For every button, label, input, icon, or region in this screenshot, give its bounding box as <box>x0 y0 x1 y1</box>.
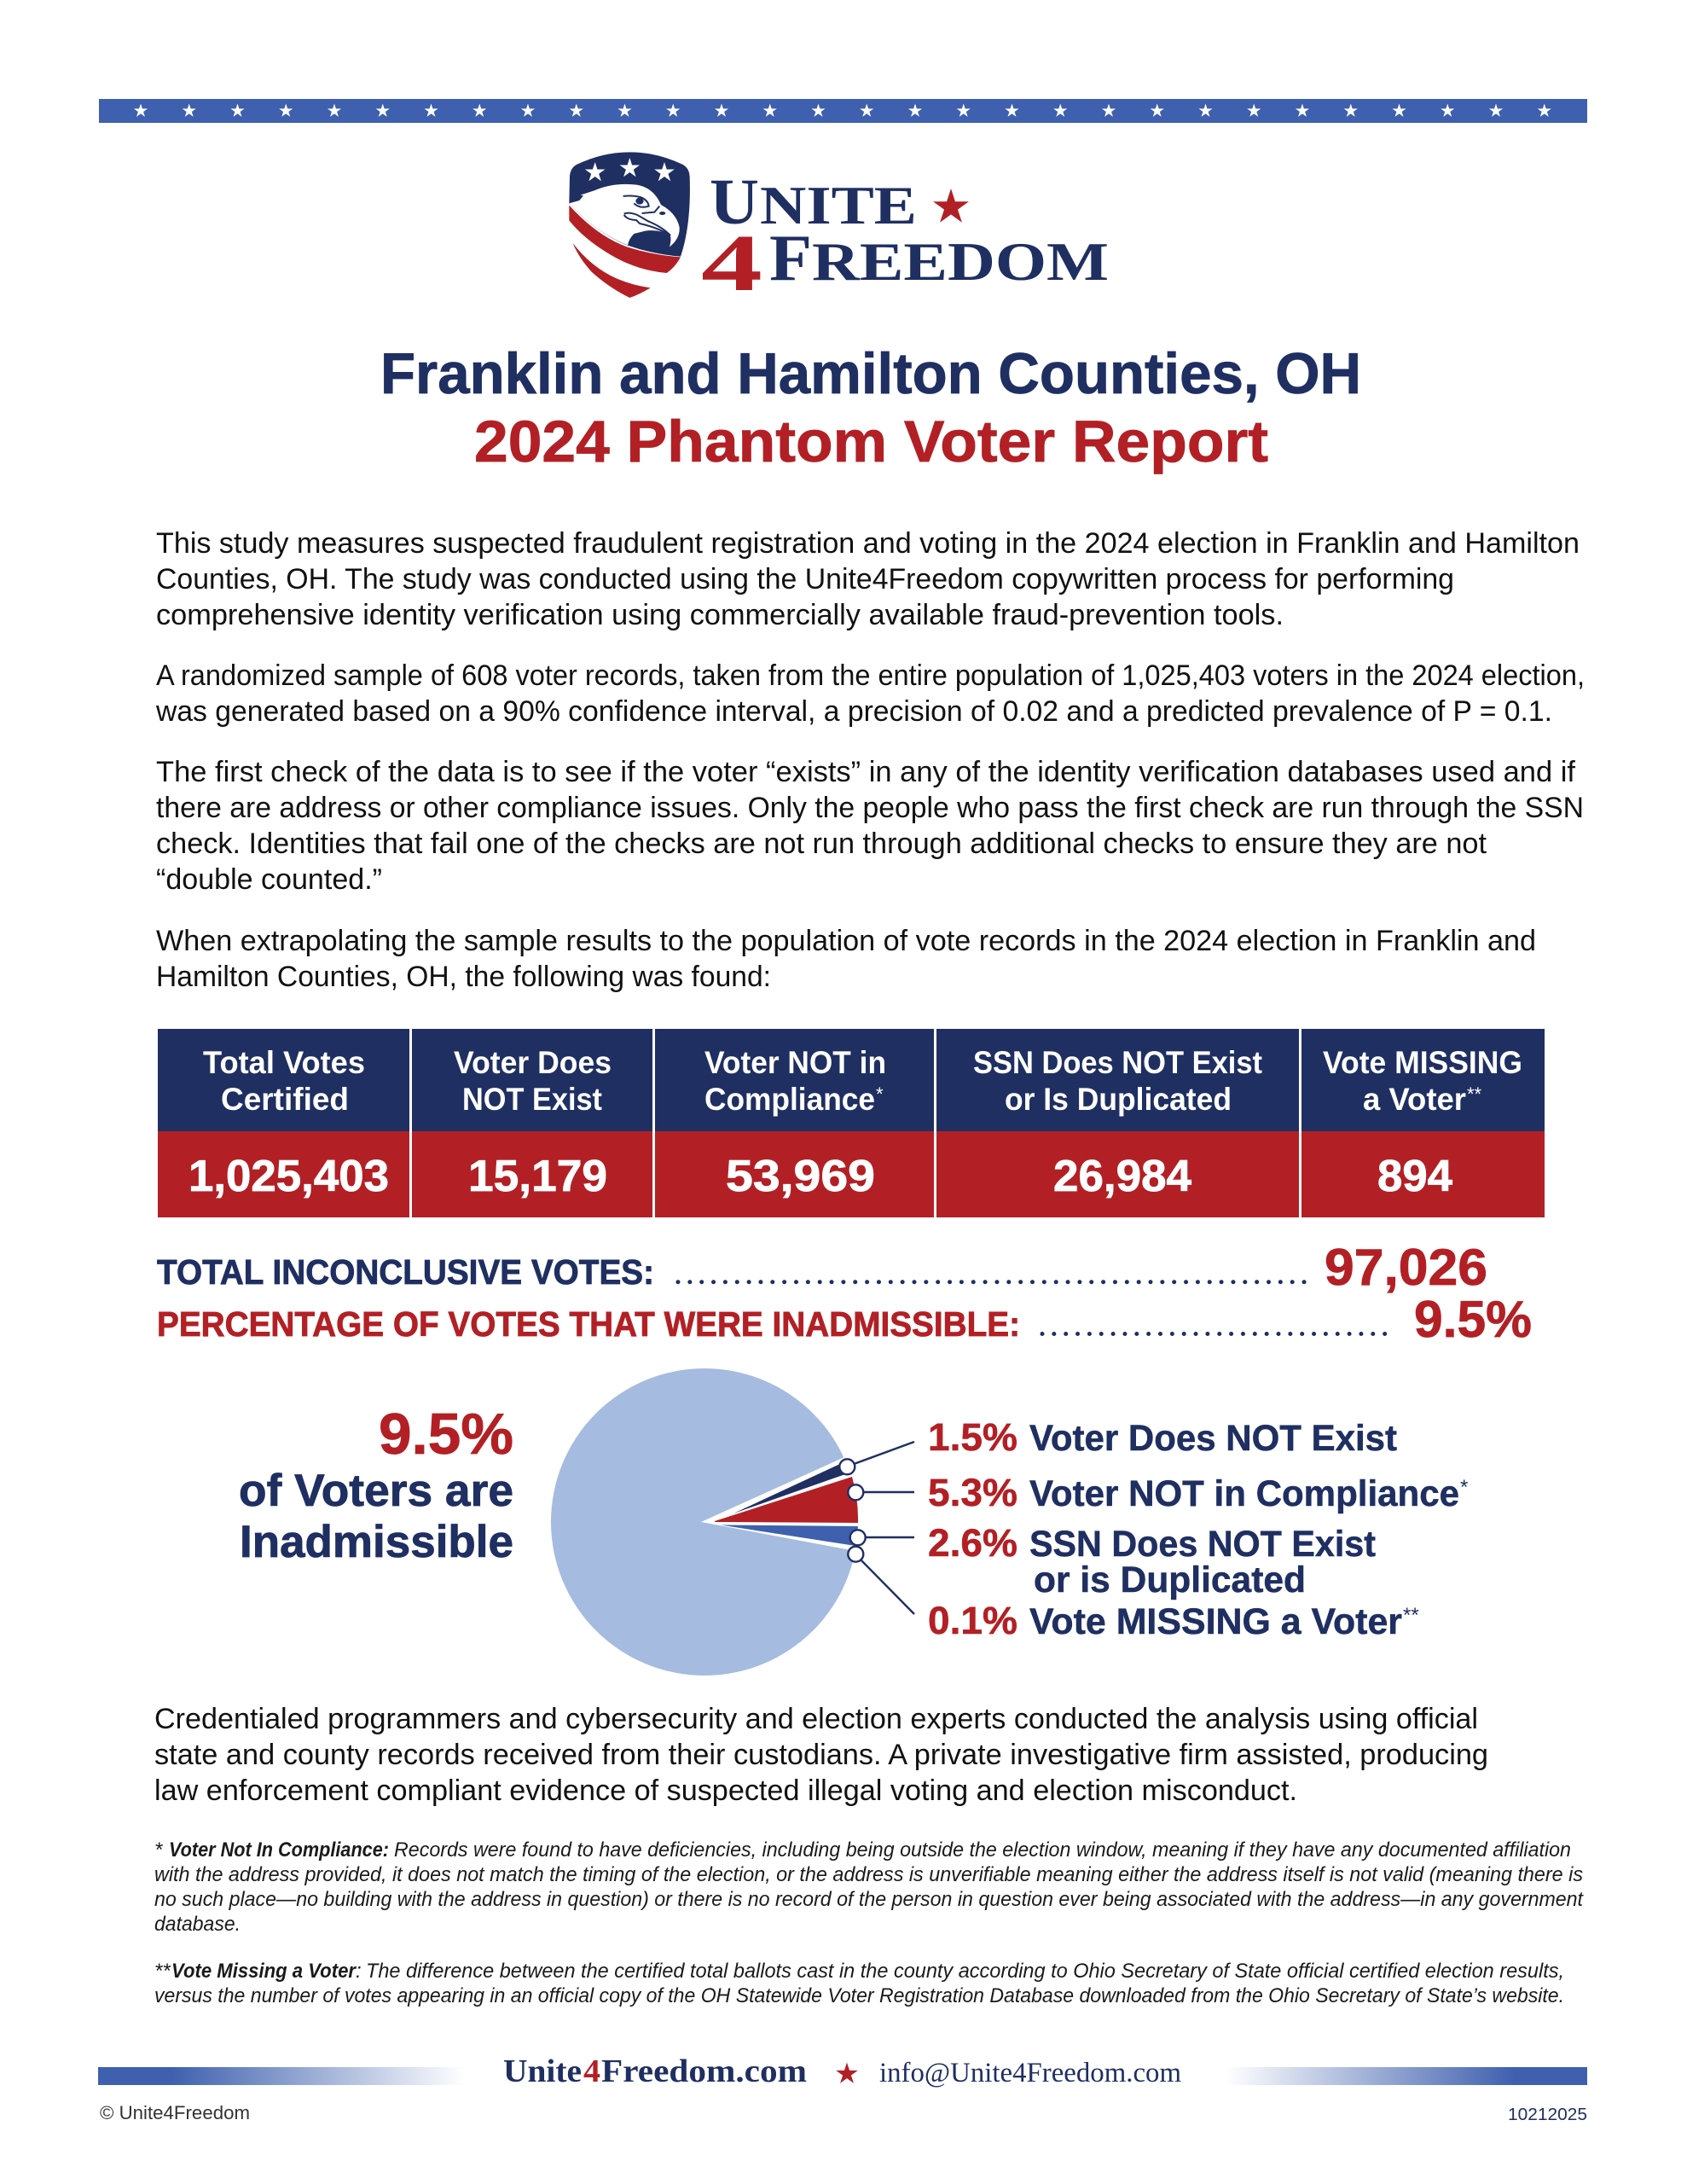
title: Franklin and Hamilton Counties, OH <box>380 341 1361 406</box>
callout: 9.5% of voters are inadmissible <box>239 1402 513 1567</box>
column: voter not in compliance <box>704 1045 886 1201</box>
top star banner <box>99 99 1587 123</box>
slice: voter not in compliance <box>715 1477 858 1523</box>
slice: ssn does not exist <box>721 1525 858 1546</box>
column: vote missing a voter: a Voter <box>1363 1082 1466 1117</box>
footnote: voter not in compliance: database. <box>154 1913 241 1936</box>
column: voter not in compliance: 53,969 <box>726 1152 875 1201</box>
legend: 0.1%: Vote MISSING a Voter <box>1029 1601 1402 1642</box>
total inconclusive votes line: 97,026 <box>1325 1239 1487 1296</box>
column: ssn does not exist: SSN Does NOT Exist <box>973 1045 1262 1080</box>
callout: 9.5% of voters are inadmissible: Inadmissible <box>240 1517 513 1567</box>
percentage inadmissible line <box>157 1291 1532 1348</box>
icon: footer star <box>836 2063 858 2083</box>
intro text block: The first check of the data is to see if the voter “exists” in any of the identity verification databases used and if <box>156 756 1576 788</box>
footer email: info@Unite4Freedom.com <box>879 2058 1181 2088</box>
footnote: voter not in compliance: with the address provided, it does not match the timing of the election, or the address is unverifiable meaning either the address itself is not valid (meaning there is <box>154 1863 1583 1886</box>
document code: 10212025 <box>1508 2106 1587 2124</box>
intro text block: check. Identities that fail one of the checks are not run through additional checks to ensure they are not <box>156 828 1487 860</box>
logo wordmark: NITE <box>760 176 917 235</box>
intro text block: When extrapolating the sample results to the population of vote records in the 2024 election in Franklin and <box>156 925 1536 957</box>
logo wordmark: 4 <box>701 218 762 308</box>
percentage inadmissible line: 9.5% <box>1414 1291 1532 1348</box>
footnote: vote missing a voter: versus the number of votes appearing in an official copy of the OH Statewide Voter Registration Database downloaded from the Ohio Secretary of State’s website. <box>154 1984 1564 2007</box>
legend: 5.3%: Voter NOT in Compliance <box>1029 1473 1459 1514</box>
closing paragraph: Credentialed programmers and cybersecurity and election experts conducted the analysis using official <box>154 1703 1478 1735</box>
footnote: vote missing a voter: ** <box>154 1960 171 1983</box>
logo wordmark: F <box>769 221 812 294</box>
column: total votes certified: Certified <box>221 1082 349 1117</box>
callout: 9.5% of voters are inadmissible: of Voters are <box>239 1466 513 1516</box>
footnote: voter not in compliance: Records were found to have deficiencies, including being outside the election window, meaning if they have any documented affiliation <box>394 1838 1571 1862</box>
column: voter does not exist: Voter Does <box>454 1045 612 1080</box>
column: voter does not exist <box>454 1045 612 1201</box>
intro text block: was generated based on a 90% confidence interval, a precision of 0.02 and a predicted prevalence of P = 0.1. <box>155 695 1552 728</box>
legend: 2.6% <box>928 1521 1376 1600</box>
intro text block <box>155 527 1585 993</box>
column: ssn does not exist <box>973 1045 1262 1201</box>
pie legend <box>928 1415 1468 1642</box>
footnote: vote missing a voter: The difference between the certified total ballots cast in the county according to Ohio Secretary of State official certified election results, <box>366 1960 1564 1983</box>
column: voter not in compliance: Voter NOT in <box>704 1045 886 1080</box>
footnote: vote missing a voter: : <box>356 1960 362 1983</box>
column: vote missing a voter: 894 <box>1377 1152 1452 1201</box>
legend: 2.6%: 2.6% <box>928 1521 1017 1565</box>
legend: 2.6%: or is Duplicated <box>1034 1560 1306 1600</box>
intro text block: Hamilton Counties, OH, the following was found: <box>156 961 771 993</box>
title <box>380 341 1361 474</box>
column: voter does not exist: 15,179 <box>468 1152 607 1201</box>
column: vote missing a voter: ** <box>1467 1083 1482 1105</box>
legend: 0.1%: 0.1% <box>928 1599 1017 1642</box>
pie chart <box>551 1368 914 1676</box>
legend: 1.5%: 1.5% <box>928 1415 1017 1459</box>
icon: eagle shield <box>569 152 690 298</box>
closing paragraph: state and county records received from their custodians. A private investigative firm assisted, producing <box>154 1739 1488 1771</box>
footnote: voter not in compliance: Voter Not In Compliance: <box>169 1838 389 1862</box>
results table <box>158 1029 1545 1217</box>
footer website: 4 <box>583 2053 600 2089</box>
column: vote missing a voter <box>1323 1045 1522 1201</box>
footer website: Unite <box>503 2053 582 2089</box>
column: total votes certified: Total Votes <box>203 1045 365 1080</box>
logo wordmark: REEDOM <box>812 232 1109 292</box>
column: total votes certified: 1,025,403 <box>188 1152 389 1201</box>
legend: 5.3%: 5.3% <box>928 1471 1017 1514</box>
intro text block: This study measures suspected fraudulent registration and voting in the 2024 election in Franklin and Hamilton <box>156 527 1580 560</box>
closing paragraph <box>154 1703 1488 1807</box>
column: voter does not exist: NOT Exist <box>462 1082 602 1117</box>
logo wordmark <box>701 166 1109 308</box>
footnote: voter not in compliance: no such place—no building with the address in question) or there is no record of the person in question ever being associated with the address—in any government <box>154 1888 1584 1911</box>
footnote: vote missing a voter: Vote Missing a Voter <box>171 1960 357 1983</box>
intro text block: “double counted.” <box>156 863 382 896</box>
column: voter not in compliance: Compliance <box>704 1082 875 1117</box>
percentage inadmissible line: PERCENTAGE OF VOTES THAT WERE INADMISSIBLE: <box>157 1304 1020 1344</box>
total inconclusive votes line <box>157 1239 1487 1296</box>
slice: voter does not exist <box>733 1463 848 1513</box>
column: ssn does not exist: 26,984 <box>1053 1152 1191 1201</box>
leader lines and markers <box>839 1442 914 1614</box>
total inconclusive votes line: TOTAL INCONCLUSIVE VOTES: <box>157 1252 654 1292</box>
footnote: vote missing a voter <box>154 1960 1564 2007</box>
footer website: Freedom.com <box>601 2053 807 2089</box>
intro text block: comprehensive identity verification using commercially available fraud-prevention tools. <box>156 599 1284 631</box>
footnote: voter not in compliance: * <box>154 1838 163 1862</box>
legend: 2.6%: SSN Does NOT Exist <box>1029 1524 1376 1565</box>
column: voter not in compliance: * <box>876 1083 884 1105</box>
legend: 5.3%: * <box>1460 1476 1468 1499</box>
footnote: voter not in compliance <box>154 1838 1584 1936</box>
title: 2024 Phantom Voter Report <box>474 409 1268 474</box>
legend: 1.5%: Voter Does NOT Exist <box>1029 1418 1397 1459</box>
closing paragraph: law enforcement compliant evidence of suspected illegal voting and election misconduct. <box>154 1774 1297 1807</box>
footer website <box>503 2053 807 2089</box>
callout: 9.5% of voters are inadmissible: 9.5% <box>379 1402 513 1467</box>
column: vote missing a voter: Vote MISSING <box>1323 1045 1522 1080</box>
legend: 0.1%: ** <box>1403 1604 1419 1627</box>
intro text block: Counties, OH. The study was conducted using the Unite4Freedom copywritten process for performing <box>156 563 1454 595</box>
intro text block: there are address or other compliance issues. Only the people who pass the first check are run through the SSN <box>156 792 1584 824</box>
logo wordmark: U <box>710 166 759 238</box>
column: total votes certified <box>188 1045 389 1201</box>
footer <box>98 2053 1587 2124</box>
intro text block: A randomized sample of 608 voter records, taken from the entire population of 1,025,403 voters in the 2024 election, <box>156 659 1585 692</box>
copyright: © Unite4Freedom <box>100 2102 250 2123</box>
column: ssn does not exist: or Is Duplicated <box>1005 1082 1232 1117</box>
logo <box>569 152 1109 308</box>
